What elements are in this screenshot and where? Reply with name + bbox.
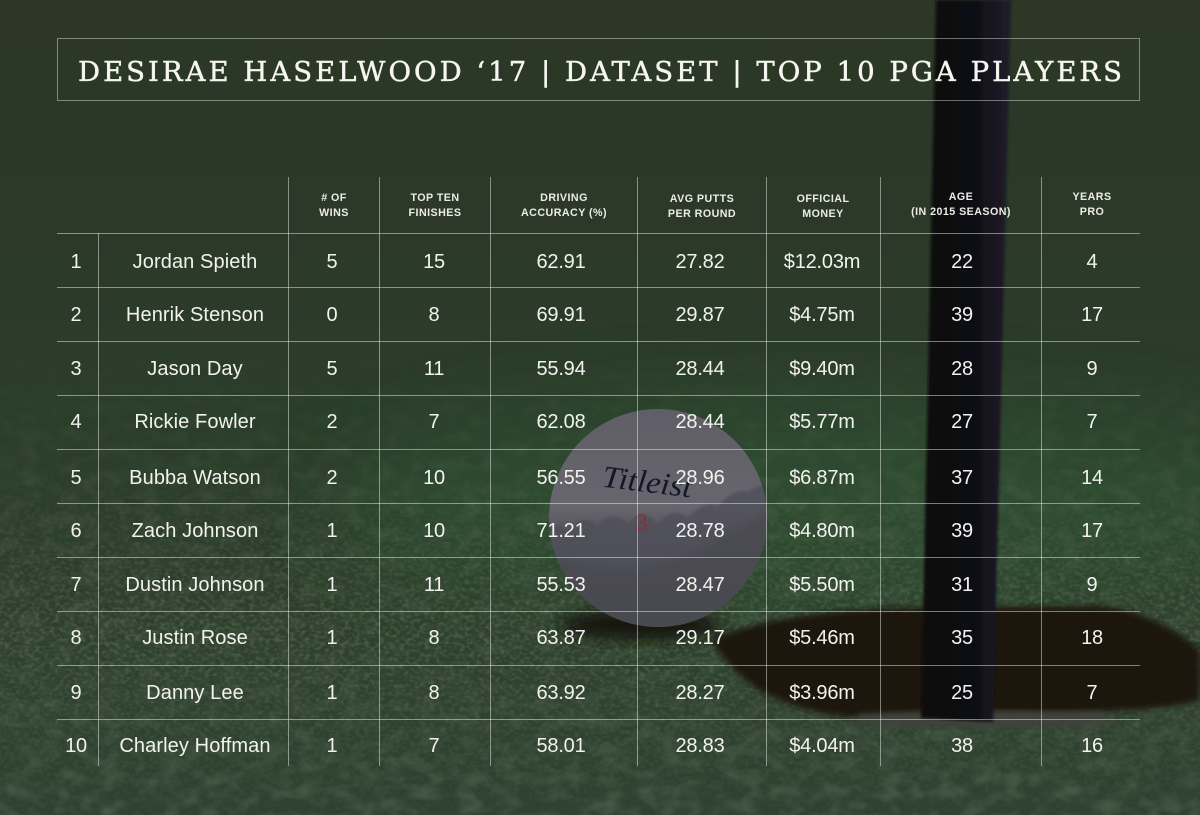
row 10: Charley Hoffman: 10 (65, 735, 87, 757)
table header: YEARS (1072, 191, 1112, 203)
row 3: Jason Day: 55.94 (536, 358, 586, 380)
table header: ACCURACY (%) (521, 207, 607, 219)
row 3: Jason Day: Jason Day (147, 358, 243, 380)
row 3: Jason Day: $9.40m (789, 358, 855, 380)
row 10: Charley Hoffman: 28.83 (675, 735, 725, 757)
row 5: Bubba Watson: 56.55 (536, 467, 586, 489)
row 7: Dustin Johnson: 55.53 (536, 574, 586, 596)
row 7: Dustin Johnson: 31 (951, 574, 973, 596)
row 3: Jason Day: 5 (327, 358, 338, 380)
row 2: Henrik Stenson (71, 304, 1103, 326)
row 2: Henrik Stenson: 2 (71, 304, 82, 326)
row 8: Justin Rose: 29.17 (675, 627, 725, 649)
row 9: Danny Lee: 25 (951, 682, 973, 704)
row 1: Jordan Spieth: 22 (951, 251, 973, 273)
row 9: Danny Lee: 28.27 (675, 682, 725, 704)
row 10: Charley Hoffman: 1 (327, 735, 338, 757)
row 5: Bubba Watson: $6.87m (789, 467, 855, 489)
row 6: Zach Johnson: $4.80m (789, 520, 855, 542)
row 2: Henrik Stenson: 29.87 (675, 304, 725, 326)
ball brand: Titleist (600, 459, 696, 505)
row 9: Danny Lee (71, 682, 1098, 704)
row 6: Zach Johnson (71, 520, 1103, 542)
row 10: Charley Hoffman: 58.01 (536, 735, 586, 757)
row 1: Jordan Spieth (71, 251, 1098, 273)
row 10: Charley Hoffman: 16 (1081, 735, 1103, 757)
table header: # OF (321, 192, 347, 204)
row 1: Jordan Spieth: 5 (327, 251, 338, 273)
row 8: Justin Rose: 8 (71, 627, 82, 649)
row 4: Rickie Fowler: $5.77m (789, 411, 855, 433)
table header: AGE (949, 191, 973, 203)
row 9: Danny Lee: 8 (429, 682, 440, 704)
row 7: Dustin Johnson (71, 574, 1098, 596)
row 4: Rickie Fowler: 7 (429, 411, 440, 433)
row 5: Bubba Watson: 28.96 (675, 467, 725, 489)
row 10: Charley Hoffman: $4.04m (789, 735, 855, 757)
table header: PER ROUND (668, 208, 736, 220)
row 2: Henrik Stenson: 69.91 (536, 304, 586, 326)
row 6: Zach Johnson: 28.78 (675, 520, 725, 542)
row 6: Zach Johnson: 1 (327, 520, 338, 542)
row 7: Dustin Johnson: 9 (1087, 574, 1098, 596)
table header: (IN 2015 SEASON) (911, 206, 1011, 218)
row 7: Dustin Johnson: 1 (327, 574, 338, 596)
row 3: Jason Day: 11 (424, 358, 444, 380)
row 1: Jordan Spieth: 4 (1087, 251, 1098, 273)
row 4: Rickie Fowler: 27 (951, 411, 973, 433)
table header: WINS (319, 207, 349, 219)
row 3: Jason Day (71, 358, 1098, 380)
row 1: Jordan Spieth: $12.03m (784, 251, 860, 273)
golf ball (549, 409, 767, 627)
ball number: 3 (634, 510, 648, 537)
row 2: Henrik Stenson: 39 (951, 304, 973, 326)
row 10: Charley Hoffman (65, 735, 1103, 757)
row 6: Zach Johnson: Zach Johnson (132, 520, 258, 542)
row 2: Henrik Stenson: 0 (327, 304, 338, 326)
row 1: Jordan Spieth: Jordan Spieth (133, 251, 257, 273)
row 3: Jason Day: 28 (951, 358, 973, 380)
row 2: Henrik Stenson: $4.75m (789, 304, 855, 326)
row 1: Jordan Spieth: 27.82 (675, 251, 725, 273)
table header: MONEY (802, 208, 844, 220)
row 8: Justin Rose: 1 (327, 627, 338, 649)
table header: FINISHES (409, 207, 461, 219)
row 6: Zach Johnson: 17 (1081, 520, 1103, 542)
table header: OFFICIAL (797, 193, 849, 205)
row 4: Rickie Fowler: 62.08 (536, 411, 586, 433)
row 8: Justin Rose: 35 (951, 627, 973, 649)
row 4: Rickie Fowler: 28.44 (675, 411, 725, 433)
row 2: Henrik Stenson: 17 (1081, 304, 1103, 326)
row 3: Jason Day: 3 (71, 358, 82, 380)
row 6: Zach Johnson: 6 (71, 520, 82, 542)
row 1: Jordan Spieth: 15 (423, 251, 445, 273)
row 10: Charley Hoffman: 7 (429, 735, 440, 757)
row 7: Dustin Johnson: 11 (424, 574, 444, 596)
row 2: Henrik Stenson: Henrik Stenson (126, 304, 264, 326)
title: DESIRAE HASELWOOD ‘17 | DATASET | TOP 10 PGA PLAYERS (78, 56, 1122, 88)
row 4: Rickie Fowler: 2 (327, 411, 338, 433)
row 5: Bubba Watson: 5 (71, 467, 82, 489)
row 2: Henrik Stenson: 8 (429, 304, 440, 326)
row 9: Danny Lee: 9 (71, 682, 82, 704)
row 7: Dustin Johnson: 7 (71, 574, 82, 596)
row 10: Charley Hoffman: Charley Hoffman (119, 735, 271, 757)
row 9: Danny Lee: 1 (327, 682, 338, 704)
row 5: Bubba Watson: 10 (423, 467, 445, 489)
row 9: Danny Lee: 7 (1087, 682, 1098, 704)
row 6: Zach Johnson: 39 (951, 520, 973, 542)
row 8: Justin Rose: 63.87 (536, 627, 586, 649)
flagstick (921, 0, 1011, 722)
row 8: Justin Rose: 18 (1081, 627, 1103, 649)
table grid (57, 177, 1140, 766)
row 7: Dustin Johnson: 28.47 (675, 574, 725, 596)
row 4: Rickie Fowler: Rickie Fowler (134, 411, 256, 433)
row 7: Dustin Johnson: Dustin Johnson (125, 574, 265, 596)
row 8: Justin Rose: $5.46m (789, 627, 855, 649)
row 8: Justin Rose: Justin Rose (142, 627, 248, 649)
row 10: Charley Hoffman: 38 (951, 735, 973, 757)
row 5: Bubba Watson: 37 (951, 467, 973, 489)
row 9: Danny Lee: $3.96m (789, 682, 855, 704)
row 5: Bubba Watson: 14 (1081, 467, 1103, 489)
table header: DRIVING (540, 192, 588, 204)
row 8: Justin Rose (71, 627, 1103, 649)
hole lip (850, 710, 1120, 728)
table header (319, 191, 1112, 220)
row 5: Bubba Watson (71, 467, 1103, 489)
row 6: Zach Johnson: 71.21 (536, 520, 586, 542)
row 4: Rickie Fowler: 7 (1087, 411, 1098, 433)
row 9: Danny Lee: 63.92 (536, 682, 586, 704)
title box (58, 38, 1140, 100)
row 1: Jordan Spieth: 1 (71, 251, 82, 273)
table header: PRO (1080, 206, 1104, 218)
row 3: Jason Day: 9 (1087, 358, 1098, 380)
hole in the green (712, 606, 1200, 718)
row 5: Bubba Watson: 2 (327, 467, 338, 489)
row 4: Rickie Fowler (71, 411, 1098, 433)
row 7: Dustin Johnson: $5.50m (789, 574, 855, 596)
row 5: Bubba Watson: Bubba Watson (129, 467, 261, 489)
row 3: Jason Day: 28.44 (675, 358, 725, 380)
row 8: Justin Rose: 8 (429, 627, 440, 649)
row 6: Zach Johnson: 10 (423, 520, 445, 542)
row 9: Danny Lee: Danny Lee (146, 682, 244, 704)
row 1: Jordan Spieth: 62.91 (536, 251, 586, 273)
row 4: Rickie Fowler: 4 (71, 411, 82, 433)
table header: TOP TEN (410, 192, 460, 204)
table header: AVG PUTTS (670, 193, 734, 205)
ball shadow (560, 610, 720, 640)
